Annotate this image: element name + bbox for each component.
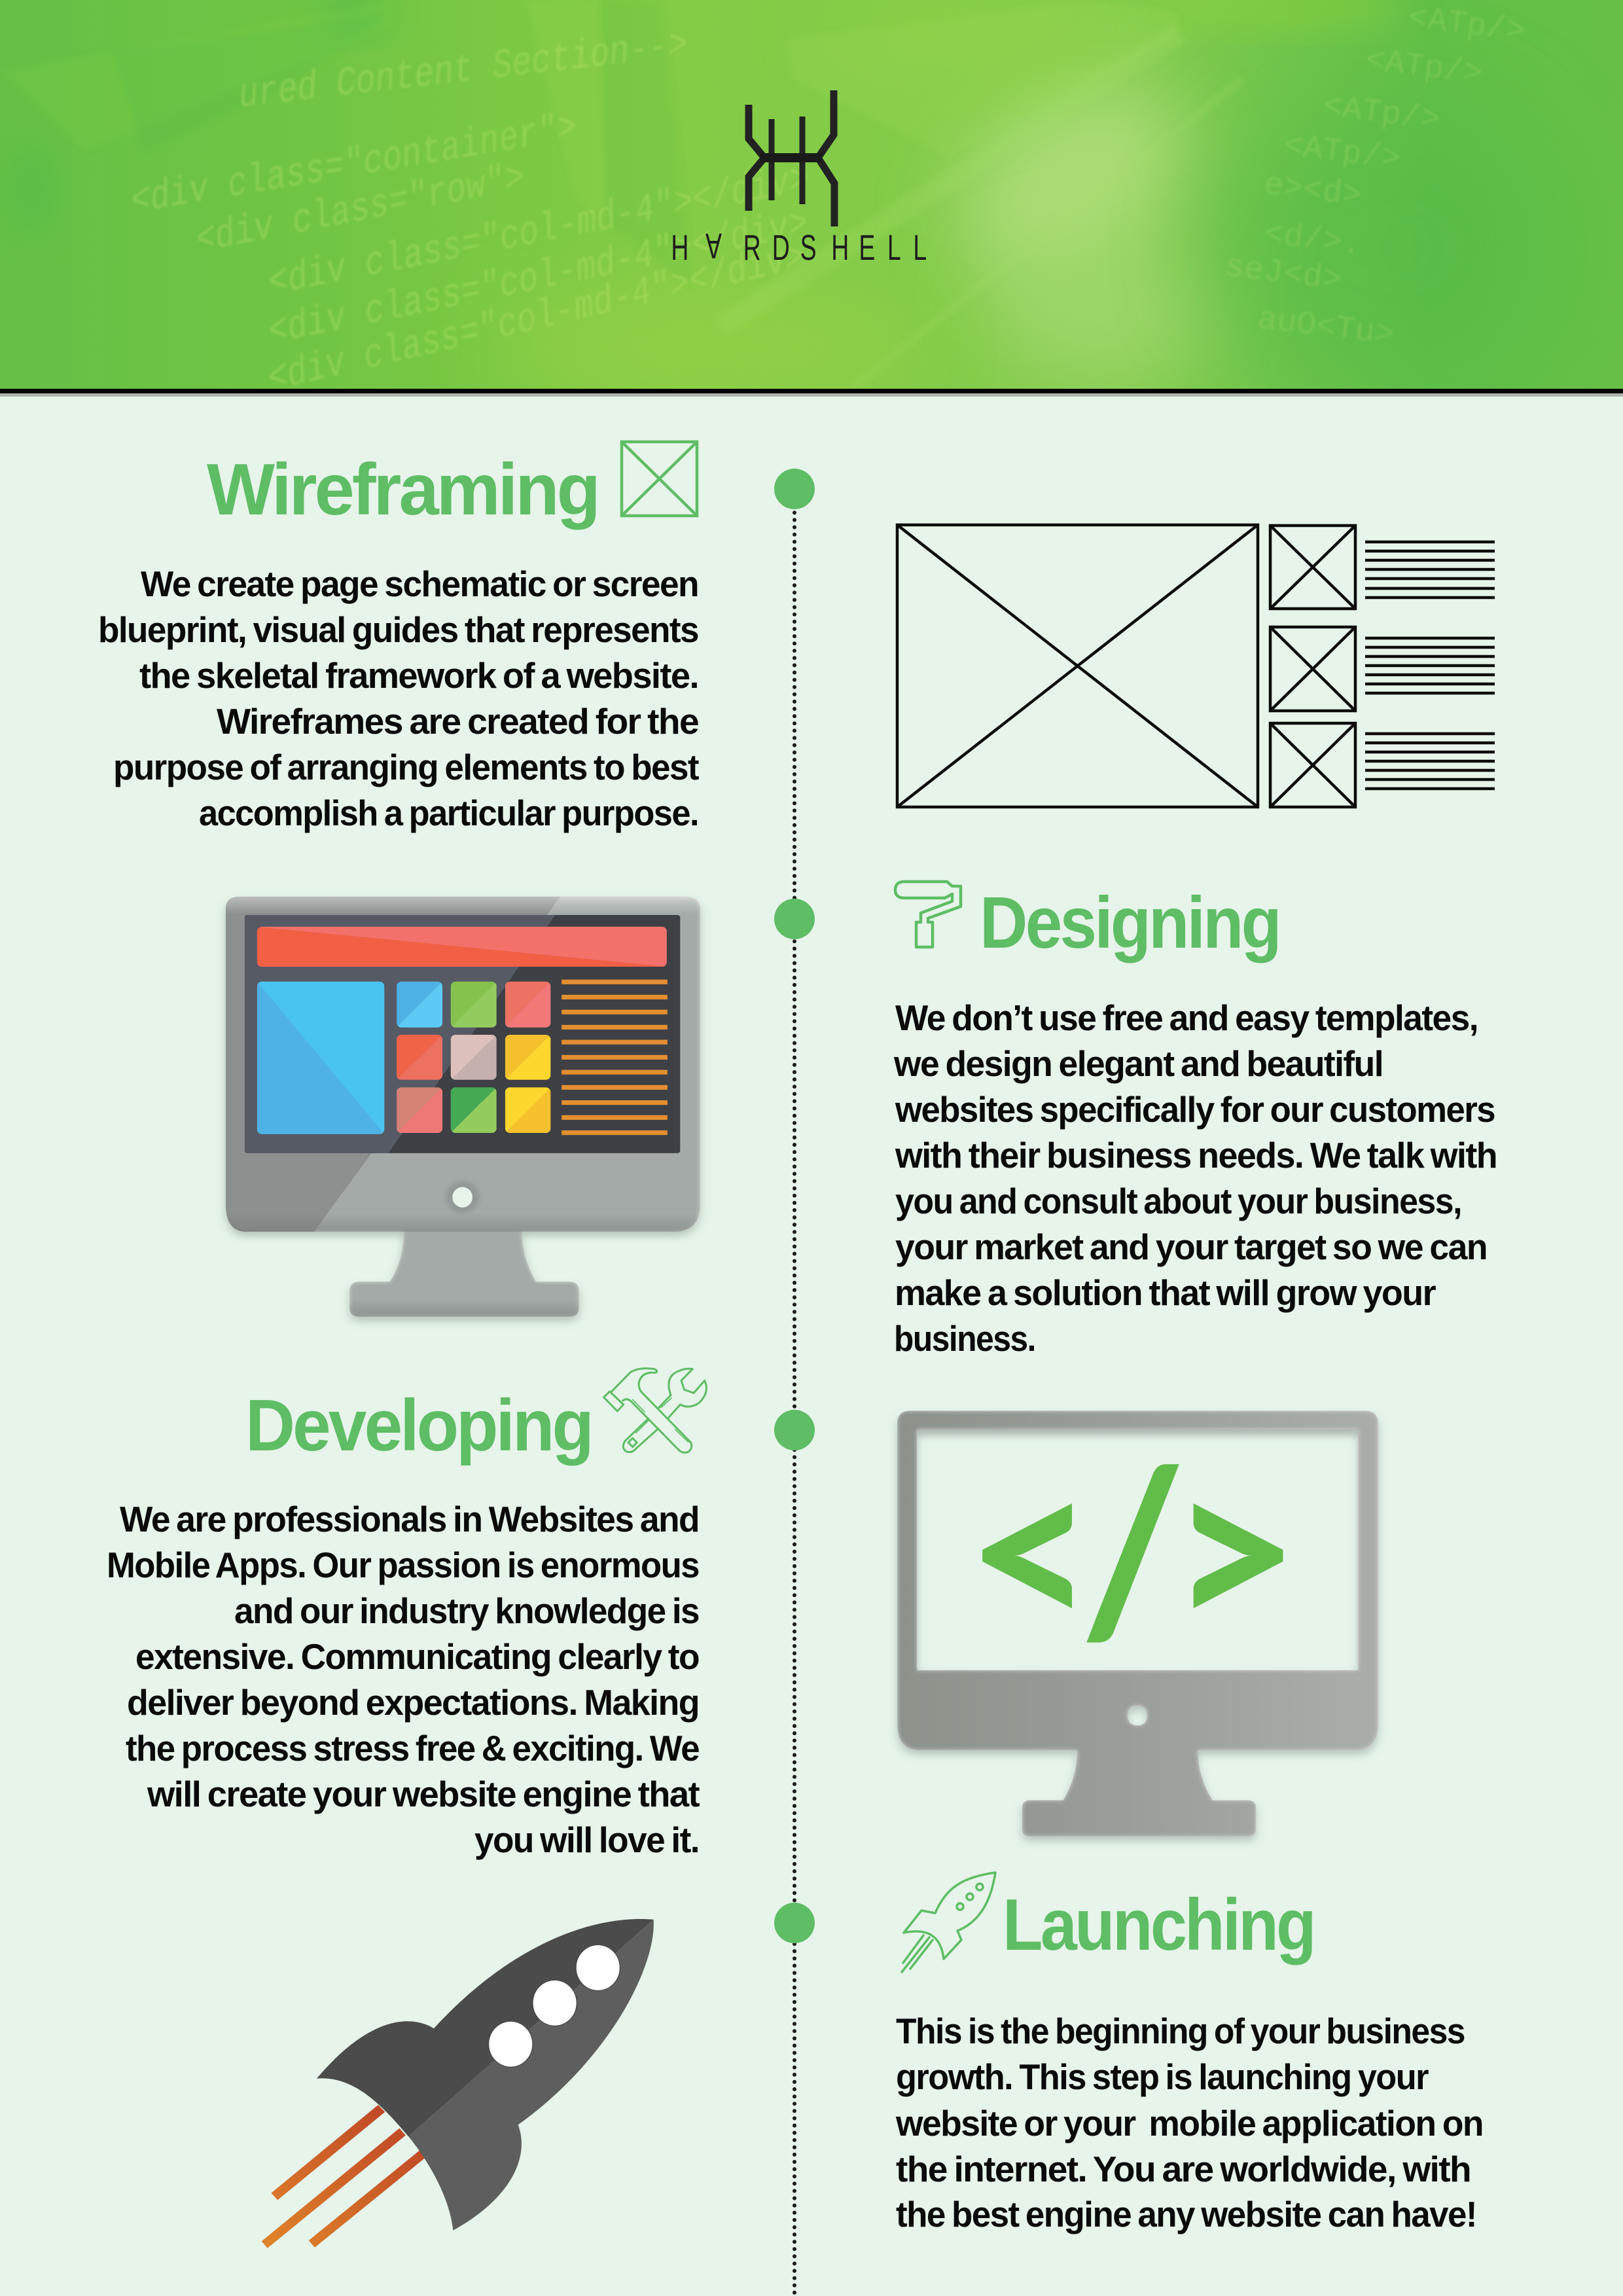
- developing text: you will love it.: [474, 1820, 699, 1860]
- rocket windows: [489, 1945, 620, 2067]
- icon: hammer and wrench: [604, 1369, 706, 1452]
- screen: [245, 915, 680, 1153]
- panel: launching: [895, 1873, 1483, 2234]
- designing text: [893, 997, 1497, 1359]
- logo wordmark: HARDSHELL: [671, 226, 927, 268]
- designing text: your market and your target so we can: [895, 1227, 1487, 1267]
- logo mark: [749, 90, 834, 226]
- text lines 2: [1365, 638, 1495, 693]
- small placeholder 1: [1270, 526, 1355, 609]
- rocket flames: [262, 2105, 425, 2248]
- icon: rocket outline: [902, 1873, 995, 1972]
- code text: left: [131, 22, 809, 404]
- code text: left: <div class="col-md-4"></div>: [267, 233, 806, 404]
- panel: designing: [893, 882, 1497, 1359]
- launching text: This is the beginning of your business: [896, 2011, 1465, 2051]
- developing text: will create your website engine that: [147, 1774, 700, 1814]
- timeline: [774, 469, 815, 2296]
- wireframe diagram: [897, 525, 1495, 807]
- header bar: [257, 927, 667, 967]
- content block: [257, 982, 384, 1134]
- developing text: We are professionals in Websites and: [120, 1499, 699, 1539]
- launching text: the best engine any website can have!: [896, 2194, 1476, 2234]
- developing text: the process stress free & exciting. We: [126, 1728, 699, 1768]
- timeline node: designing: [774, 899, 815, 939]
- screen top shade: [917, 1429, 1358, 1441]
- code text: right: <ATp/>: [1406, 0, 1527, 51]
- developing text: and our industry knowledge is: [234, 1590, 699, 1631]
- wireframing text: accomplish a particular purpose.: [199, 793, 698, 833]
- code symbol: slash: [1086, 1464, 1179, 1642]
- heading: Designing: Designing: [980, 882, 1279, 963]
- wireframing text: purpose of arranging elements to best: [113, 747, 699, 787]
- heading: Launching: Launching: [1003, 1884, 1314, 1965]
- code text: right: <ATp/>: [1321, 88, 1442, 139]
- heading: Developing: Developing: [245, 1385, 592, 1466]
- rocket body dark half: [317, 1919, 654, 2136]
- code text: right: <ATp/>: [1363, 42, 1485, 94]
- text lines 3: [1365, 734, 1495, 789]
- code symbol: greater than: [1194, 1503, 1283, 1608]
- icon: paint roller: [895, 882, 961, 947]
- code text: left: ured Content Section-->: [238, 22, 689, 120]
- small placeholder 3: [1270, 723, 1355, 807]
- code text: right: [1222, 0, 1527, 354]
- monitor body: [897, 1410, 1378, 1837]
- illustration: rocket: [262, 1919, 654, 2248]
- designing text: We don’t use free and easy templates,: [895, 997, 1478, 1038]
- large image placeholder: [897, 525, 1258, 807]
- code text: left: <div class="row">: [196, 154, 524, 265]
- developing text: extensive. Communicating clearly to: [135, 1636, 699, 1677]
- developing text: [107, 1499, 700, 1860]
- designing text: with their business needs. We talk with: [895, 1135, 1497, 1175]
- developing text: Mobile Apps. Our passion is enormous: [107, 1545, 699, 1585]
- panel: developing: [107, 1369, 706, 1860]
- rocket body light half: [408, 1920, 654, 2231]
- designing text: websites specifically for our customers: [895, 1089, 1495, 1130]
- header banner: [0, 0, 1623, 406]
- code text: right: <d/>.: [1262, 215, 1364, 264]
- designing text: make a solution that will grow your: [895, 1272, 1436, 1313]
- designing text: you and consult about your business,: [895, 1181, 1461, 1221]
- code text: right: seJ<d>: [1222, 248, 1344, 300]
- designing text: we design elegant and beautiful: [893, 1043, 1383, 1084]
- tile grid: [397, 982, 550, 1133]
- code text: left: <div class="col-md-4"></div>: [268, 156, 809, 308]
- wireframing text: We create page schematic or screen: [141, 564, 698, 604]
- designing text: business.: [894, 1318, 1035, 1359]
- timeline node: wireframing: [774, 469, 815, 509]
- launching text: the internet. You are worldwide, with: [896, 2149, 1471, 2189]
- text lines 1: [1365, 542, 1495, 598]
- code text: right: auO<Tu>: [1255, 300, 1396, 354]
- logo: hardshell: [671, 90, 927, 268]
- banner texture: [0, 0, 1623, 406]
- developing text: deliver beyond expectations. Making: [127, 1682, 699, 1723]
- monitor body: [226, 897, 700, 1317]
- wireframing text: Wireframes are created for the: [217, 701, 698, 742]
- camera: [446, 1181, 479, 1213]
- code text: left: <div class="col-md-4"></div>: [268, 200, 808, 357]
- illustration: code monitor: [897, 1410, 1378, 1837]
- code text: right: <ATp/>: [1281, 127, 1403, 179]
- body shading: [226, 897, 700, 1317]
- launching text: website or your mobile application on: [895, 2103, 1483, 2144]
- wireframing text: [98, 564, 699, 833]
- wireframing text: the skeletal framework of a website.: [139, 655, 698, 696]
- wireframing text: blueprint, visual guides that represents: [98, 609, 698, 650]
- icon: wireframe box: [622, 442, 697, 516]
- orange text lines: [562, 980, 668, 1135]
- launching text: growth. This step is launching your: [896, 2056, 1429, 2097]
- panel: wireframing: [98, 442, 699, 833]
- launching text: [895, 2011, 1483, 2234]
- timeline node: launching: [774, 1903, 815, 1943]
- code text: right: e><d>: [1262, 166, 1364, 215]
- illustration: design monitor: [226, 897, 700, 1317]
- small placeholder 2: [1270, 627, 1355, 711]
- header black rule: [0, 389, 1623, 393]
- code text: left: <div class="container">: [131, 104, 577, 226]
- code symbol: less than: [982, 1503, 1072, 1608]
- heading: Wireframing: Wireframing: [207, 449, 598, 530]
- timeline node: developing: [774, 1410, 815, 1450]
